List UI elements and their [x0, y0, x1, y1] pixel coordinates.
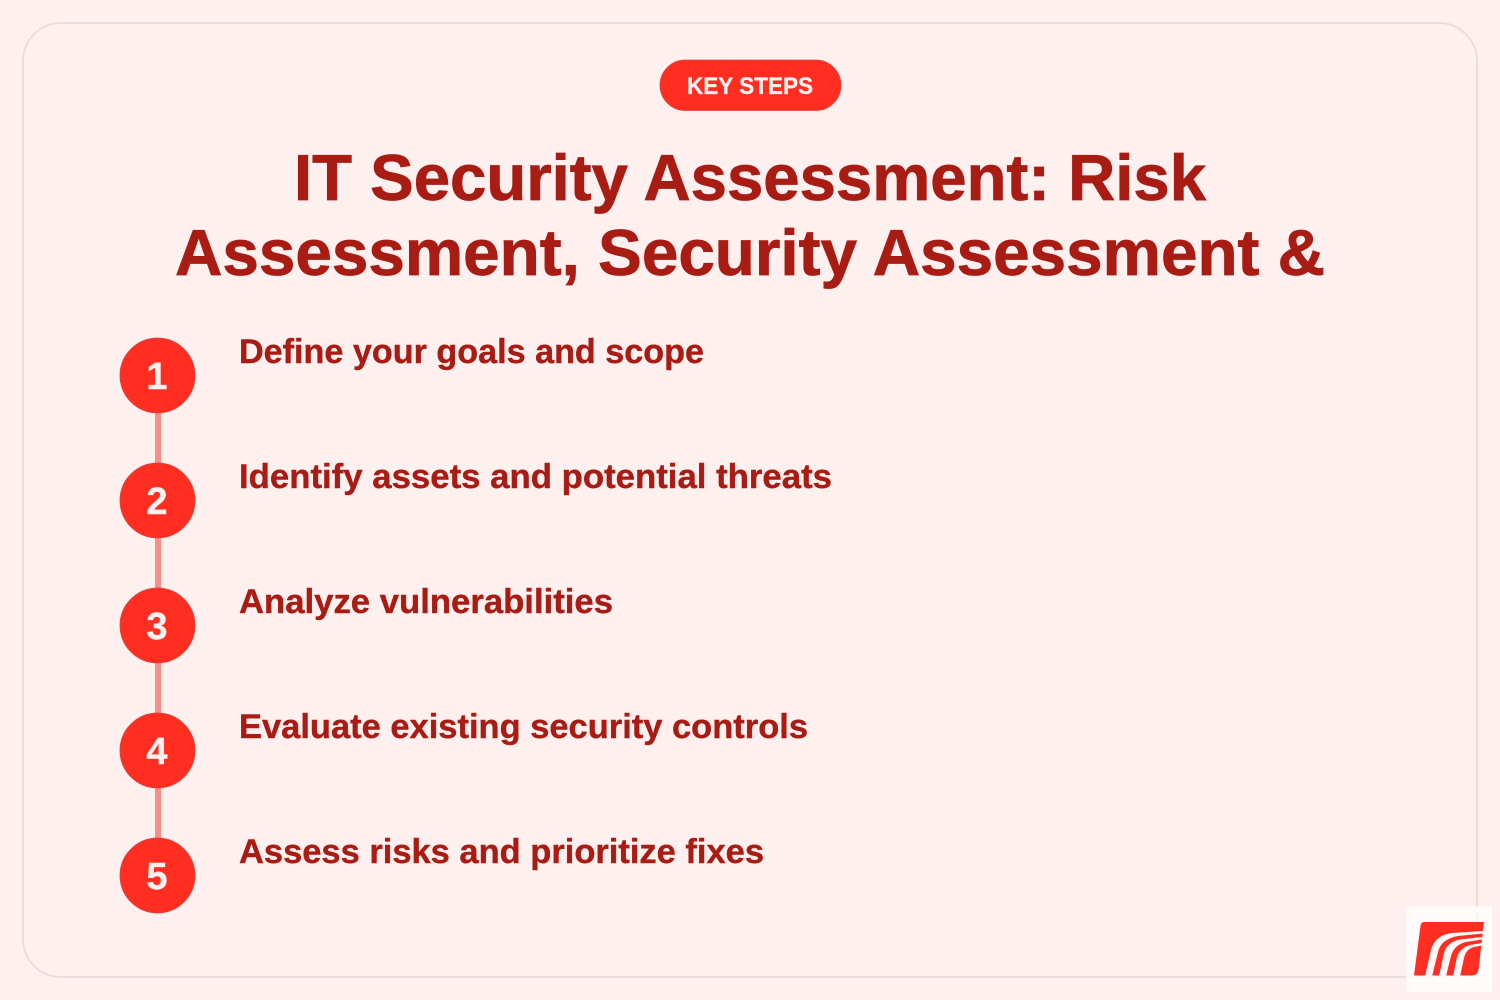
step 1: [120, 333, 704, 413]
step 5: Assess risks and prioritize fixes: [239, 833, 764, 871]
step 3: Analyze vulnerabilities: [239, 583, 613, 621]
title: Assessment, Security Assessment &: [175, 216, 1325, 289]
step 2: Identify assets and potential threats: [239, 458, 832, 496]
step 1: 1: [146, 356, 168, 398]
badge: key steps: KEY STEPS: [687, 73, 813, 100]
timeline connectors: [155, 410, 161, 841]
step 2: [120, 458, 832, 538]
step 2: 2: [146, 481, 168, 523]
step 3: [120, 583, 613, 663]
step 4: 4: [146, 731, 168, 773]
step 5: 5: [146, 856, 168, 898]
step 1: Define your goals and scope: [239, 333, 704, 371]
title: IT Security Assessment: Risk: [294, 141, 1207, 214]
badge: key steps: [660, 60, 841, 110]
title: [175, 141, 1325, 289]
icon: logo: [1406, 906, 1492, 992]
step 4: Evaluate existing security controls: [239, 708, 808, 746]
step 3: 3: [146, 606, 168, 648]
step 4: [120, 708, 808, 788]
step 5: [120, 833, 764, 913]
